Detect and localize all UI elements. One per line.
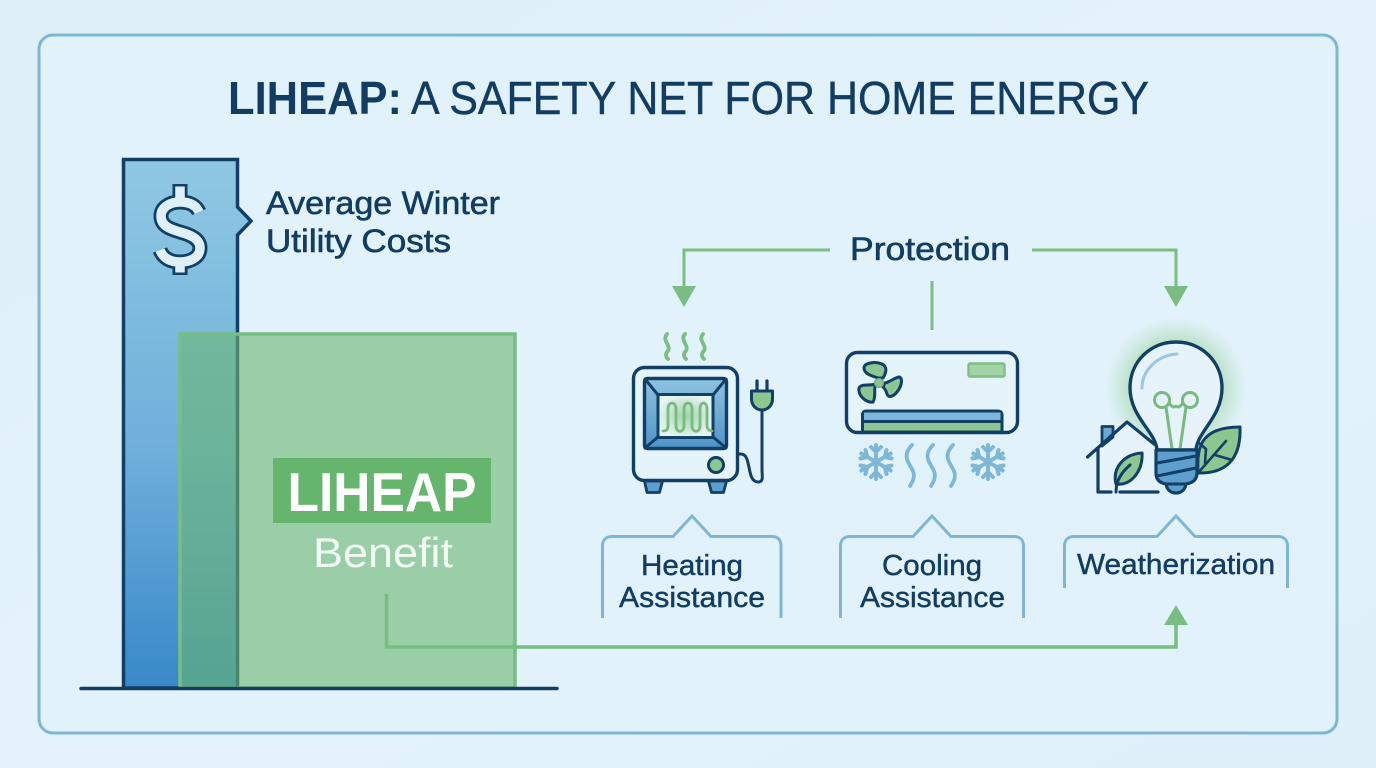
benefit label: Benefit [313,529,453,576]
label: cooling assistance: Cooling [882,550,982,582]
label: heating assistance: Assistance [619,582,765,614]
bulb glass [1130,342,1222,450]
bar: average winter utility costs [124,160,251,688]
icon: dollar sign [160,184,200,275]
label: heating assistance: Heating [641,550,743,582]
title: A SAFETY NET FOR HOME ENERGY [411,72,1149,124]
house [1088,422,1158,492]
arrow: protection to heating [672,250,830,307]
icon: light bulb with house and leaves [1088,317,1247,493]
LIHEAP badge: LIHEAP [288,461,476,523]
label: cooling assistance: Assistance [860,582,1005,614]
label: average winter utility costs: Average Winter [266,185,500,221]
title: LIHEAP: [228,72,402,124]
icon: air conditioner [846,352,1018,486]
snowflake right [972,445,1004,479]
large leaf [1198,427,1240,473]
snowflake left [860,445,892,479]
label: cooling assistance [840,516,1024,618]
arrow: protection to weatherization [1032,250,1188,307]
label: average winter utility costs [266,185,500,259]
connector: protection to cooling [930,281,934,330]
label: weatherization: Weatherization [1077,549,1275,581]
icon: space heater [634,334,772,492]
protection heading: Protection [850,231,1010,267]
cold air waves [907,445,955,486]
baseline axis [81,687,557,690]
label: weatherization [1064,516,1288,588]
label: average winter utility costs: Utility Costs [266,223,451,259]
bar: LIHEAP benefit [180,334,515,688]
bulb base [1156,450,1197,493]
arrow: benefit to weatherization [386,594,1188,647]
filament [1154,392,1198,449]
label: heating assistance [602,516,781,618]
